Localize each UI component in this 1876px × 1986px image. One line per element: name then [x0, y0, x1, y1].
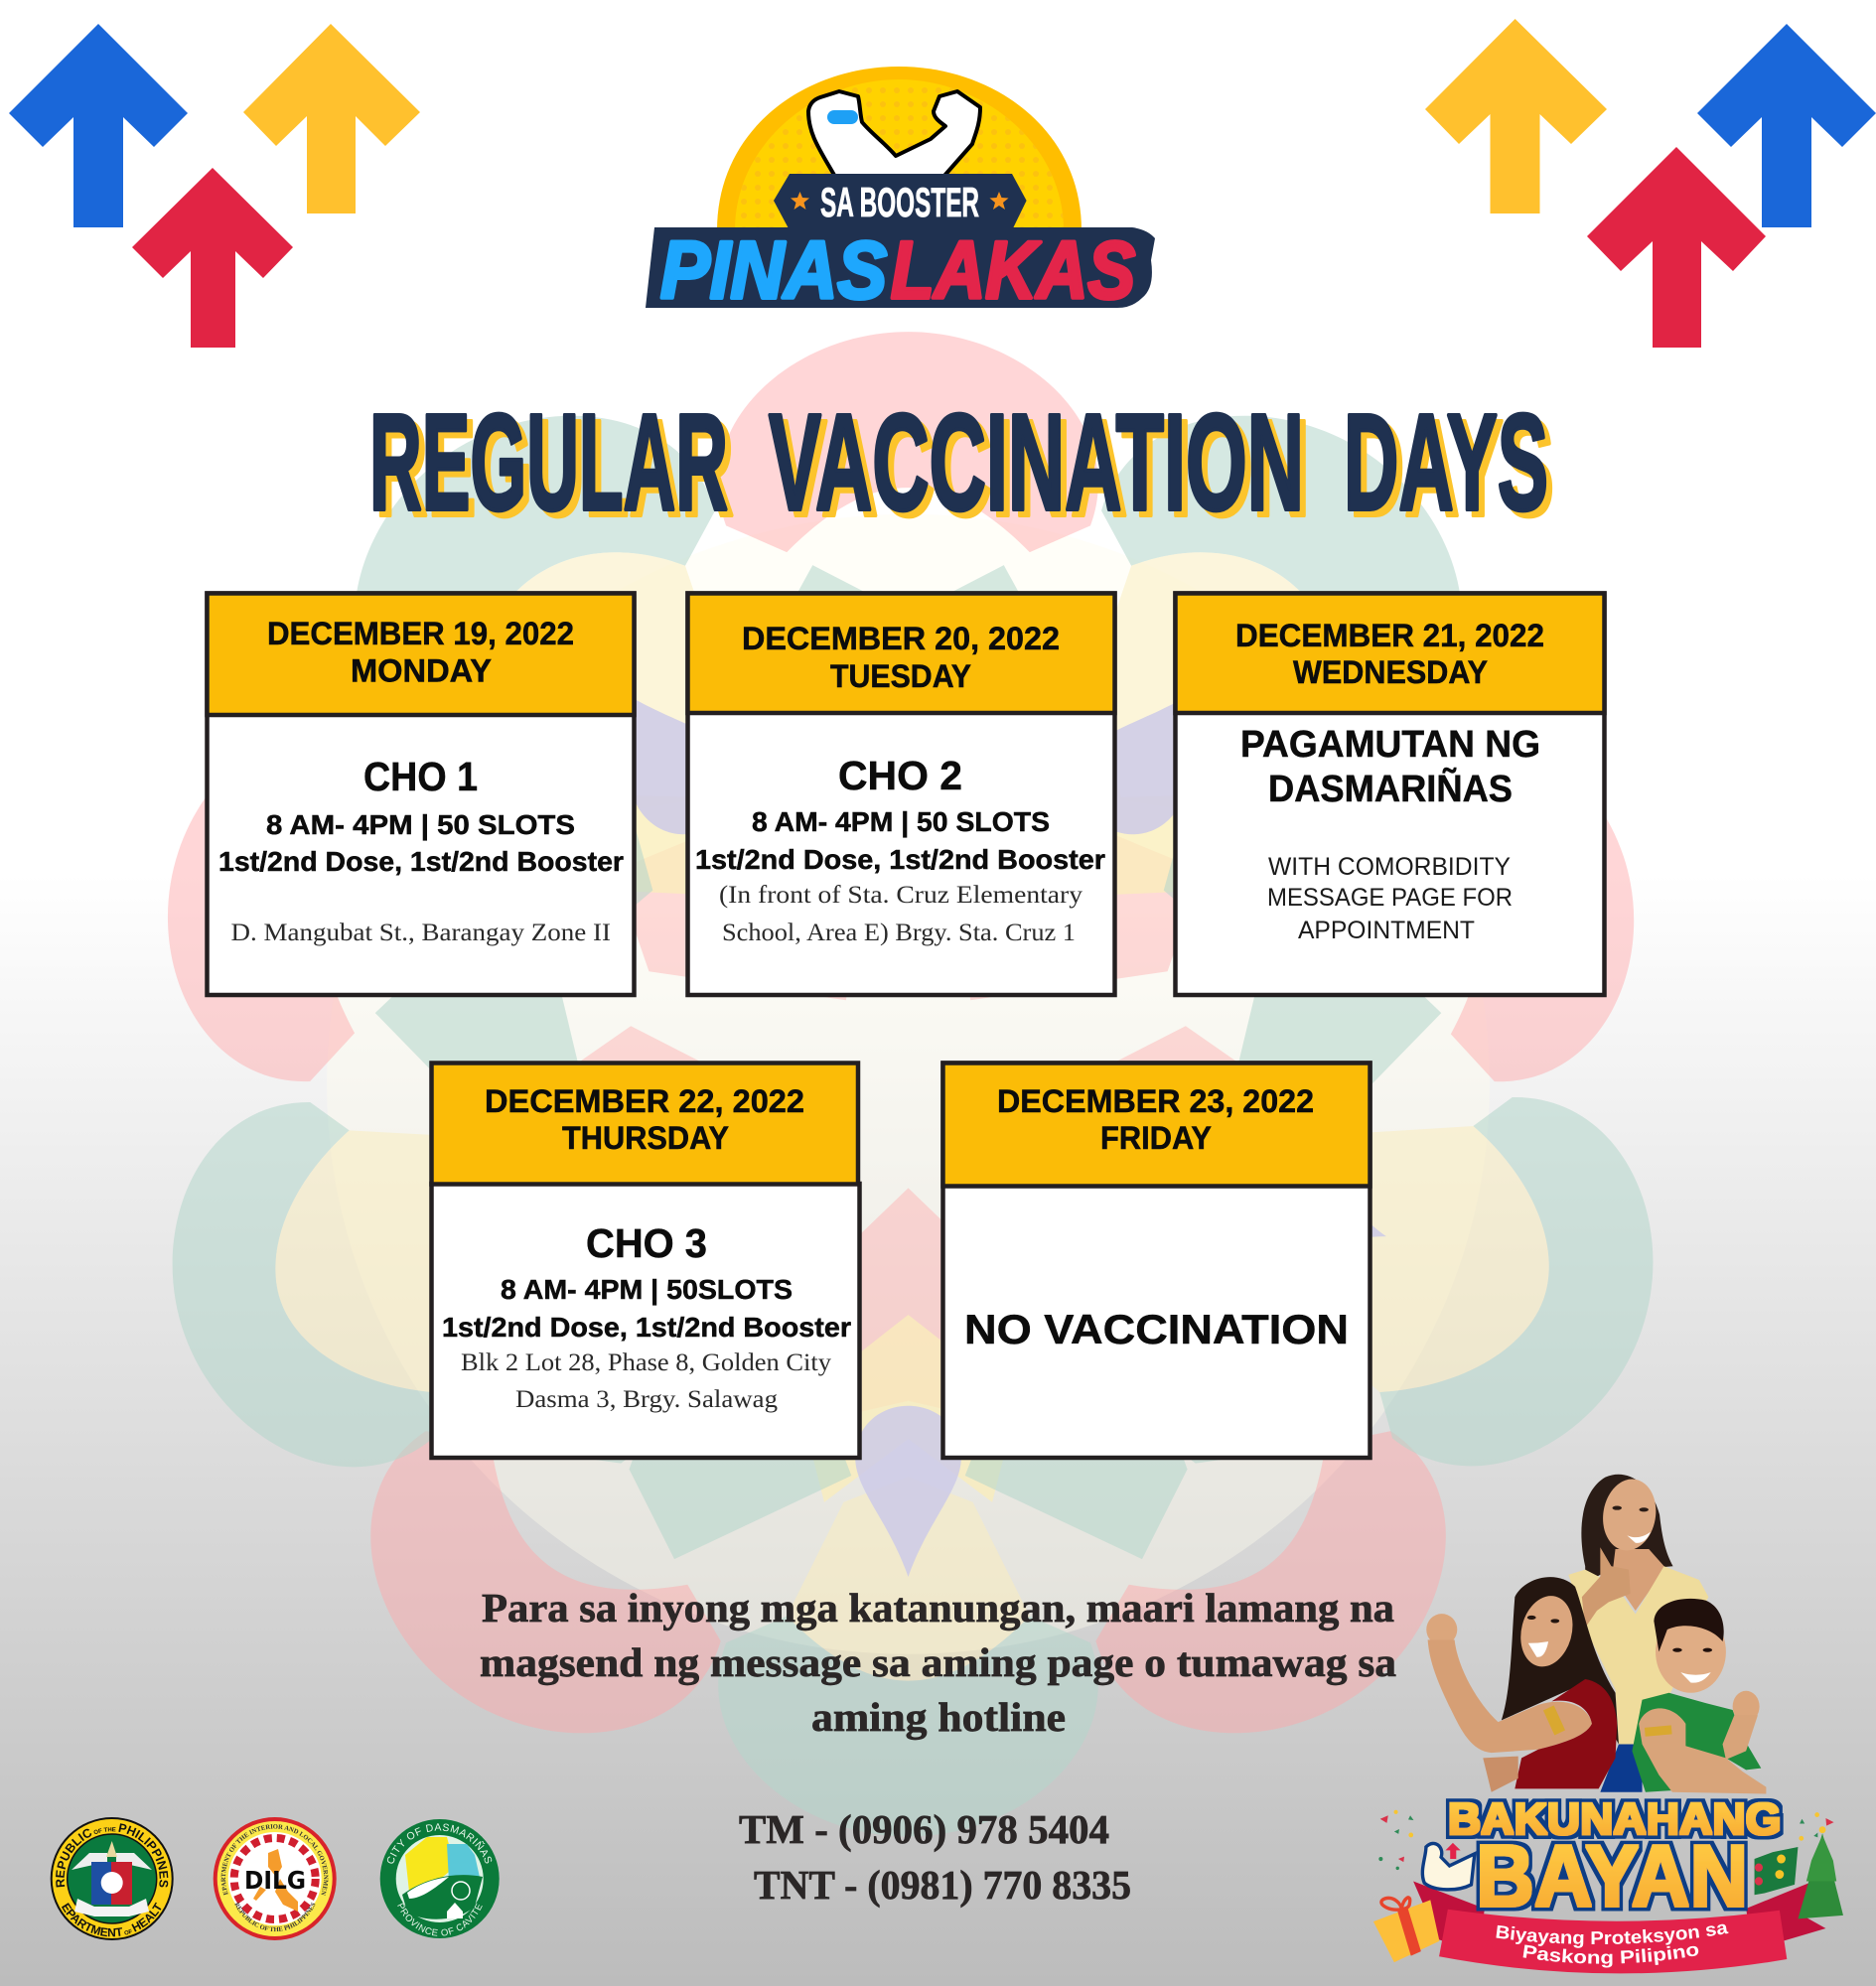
doses: 1st/2nd Dose, 1st/2nd Booster	[218, 846, 624, 877]
banner text: Biyayang Proteksyon sa	[1496, 1924, 1728, 1948]
text block: hotline numbers: TNT - (0981) 770 8335	[754, 1862, 1131, 1908]
panel: December 21 Wednesday Pagamutan ng Dasmarinas	[1176, 594, 1605, 995]
site name line 2: DASMARIÑAS	[1268, 767, 1513, 810]
icon: DILG seal: DILG	[244, 1866, 306, 1895]
address line 1: (In front of Sta. Cruz Elementary	[719, 882, 1083, 909]
icon: DILG seal: REPUBLIC OF THE PHILIPPINES	[234, 1902, 316, 1932]
address line 2: School, Area E) Brgy. Sta. Cruz 1	[722, 920, 1076, 946]
icon: DILG seal: DEPARTMENT OF THE INTERIOR AND LOCAL GOVERNMENT	[220, 1824, 328, 1897]
title: Regular Vaccination Days: REGULAR	[369, 386, 728, 539]
site name line 1: PAGAMUTAN NG	[1240, 724, 1540, 766]
site name: CHO 1	[363, 754, 478, 799]
text block: inquiry message: aming hotline	[811, 1694, 1066, 1740]
site name: CHO 2	[838, 753, 962, 798]
logo text: pinas: PINAS	[660, 225, 887, 316]
icon: star left	[791, 192, 809, 210]
hours and slots: 8 AM- 4PM | 50SLOTS	[501, 1274, 793, 1305]
icon: City of Dasmarinas seal: PROVINCE OF CAVITE	[397, 1903, 483, 1936]
icon: blue arrow right	[1697, 24, 1876, 227]
icon: yellow arrow left	[243, 24, 420, 213]
header weekday: WEDNESDAY	[1293, 654, 1488, 690]
note line 3: APPOINTMENT	[1298, 917, 1475, 944]
banner ribbon	[1439, 1910, 1787, 1973]
logo ribbon with Sa Booster	[774, 174, 1027, 230]
text block: inquiry message: magsend ng message sa aming page o tumawag sa	[480, 1639, 1396, 1685]
icon: City of Dasmarinas seal: CITY OF DASMARIÑAS	[387, 1823, 493, 1864]
text block: inquiry message	[480, 1585, 1396, 1740]
header weekday: FRIDAY	[1100, 1120, 1212, 1156]
card header	[431, 1063, 858, 1184]
title: Regular Vaccination Days	[369, 386, 1548, 539]
card header	[207, 594, 634, 715]
logo text: sa booster: SA BOOSTER	[820, 179, 979, 225]
header weekday: MONDAY	[351, 653, 492, 689]
logo: Sa Booster PinasLakas	[646, 67, 1155, 316]
panel: December 20 Tuesday CHO 2	[687, 594, 1114, 995]
icon: flexed arm	[1422, 1843, 1475, 1890]
icon: Department of Health seal	[50, 1817, 174, 1940]
doses: 1st/2nd Dose, 1st/2nd Booster	[695, 844, 1105, 875]
icon: yellow arrow right	[1425, 19, 1607, 213]
icon: DILG seal	[213, 1817, 337, 1940]
icon: City of Dasmarinas seal	[379, 1819, 500, 1938]
address line 2: Dasma 3, Brgy. Salawag	[515, 1386, 779, 1413]
illustration: Bakunahang Bayan family and logo	[1373, 1474, 1843, 1974]
icon: ribbon tails	[1413, 1881, 1825, 1953]
card header	[687, 594, 1114, 713]
icon: small red arrow	[1445, 1843, 1461, 1859]
address line 1: Blk 2 Lot 28, Phase 8, Golden City	[461, 1349, 832, 1376]
confetti	[1378, 1810, 1834, 1870]
icon: Department of Health seal: REPUBLIC OF THE PHILIPPINES	[56, 1823, 169, 1887]
icon: blue arrow left	[9, 24, 188, 227]
site name: CHO 3	[586, 1220, 707, 1266]
icon: red arrow left	[132, 168, 293, 348]
icon: red arrow right	[1587, 147, 1766, 348]
logo text: Bayan: BAYAN	[1476, 1827, 1748, 1924]
no vaccination notice: NO VACCINATION	[964, 1306, 1349, 1352]
logo text: lakas: LAKAS	[891, 225, 1135, 316]
note line 1: WITH COMORBIDITY	[1268, 853, 1511, 881]
header date: DECEMBER 20, 2022	[742, 621, 1060, 656]
hours and slots: 8 AM- 4PM | 50 SLOTS	[266, 809, 575, 840]
hours and slots: 8 AM- 4PM | 50 SLOTS	[752, 806, 1050, 837]
icon: Christmas tree	[1798, 1826, 1843, 1918]
header date: DECEMBER 22, 2022	[485, 1083, 804, 1119]
icon: Filipino parol blocks	[1755, 1847, 1798, 1895]
card header	[1176, 594, 1605, 713]
logo bar	[646, 227, 1155, 308]
background flower mandala	[119, 332, 1703, 1836]
icon: top-right arrow group	[1425, 19, 1876, 348]
panel: December 19 Monday CHO 1	[207, 594, 634, 995]
girl figure	[1426, 1577, 1619, 1792]
title: Regular Vaccination Days: DAYS	[1344, 386, 1548, 539]
text block: inquiry message: Para sa inyong mga katanungan, maari lamang na	[482, 1585, 1394, 1631]
address: D. Mangubat St., Barangay Zone II	[230, 920, 611, 946]
mother figure	[1568, 1475, 1708, 1792]
header date: DECEMBER 23, 2022	[997, 1083, 1314, 1119]
header date: DECEMBER 21, 2022	[1235, 618, 1544, 653]
icon: flexed arm	[808, 91, 980, 177]
note line 2: MESSAGE PAGE FOR	[1267, 884, 1513, 912]
banner text: Paskong Pilipino	[1523, 1944, 1698, 1968]
card header	[943, 1063, 1371, 1186]
panel: December 23 Friday No Vaccination	[943, 1063, 1371, 1458]
logo sun dome	[717, 67, 1082, 230]
header weekday: TUESDAY	[830, 658, 971, 694]
icon: top-left arrow group	[9, 24, 420, 348]
boy figure	[1632, 1599, 1766, 1794]
logo text: Bakunahang: BAKUNAHANG	[1448, 1794, 1782, 1844]
text block: hotline numbers	[739, 1806, 1131, 1908]
text block: hotline numbers: TM - (0906) 978 5404	[739, 1806, 1109, 1852]
header weekday: THURSDAY	[562, 1120, 729, 1156]
panel: December 22 Thursday CHO 3	[431, 1063, 860, 1458]
icon: gift box	[1373, 1898, 1439, 1962]
title: Regular Vaccination Days: VACCINATION	[769, 386, 1304, 539]
icon: star right	[989, 192, 1009, 210]
banner text	[1496, 1924, 1728, 1968]
header date: DECEMBER 19, 2022	[267, 616, 574, 651]
doses: 1st/2nd Dose, 1st/2nd Booster	[442, 1312, 851, 1343]
